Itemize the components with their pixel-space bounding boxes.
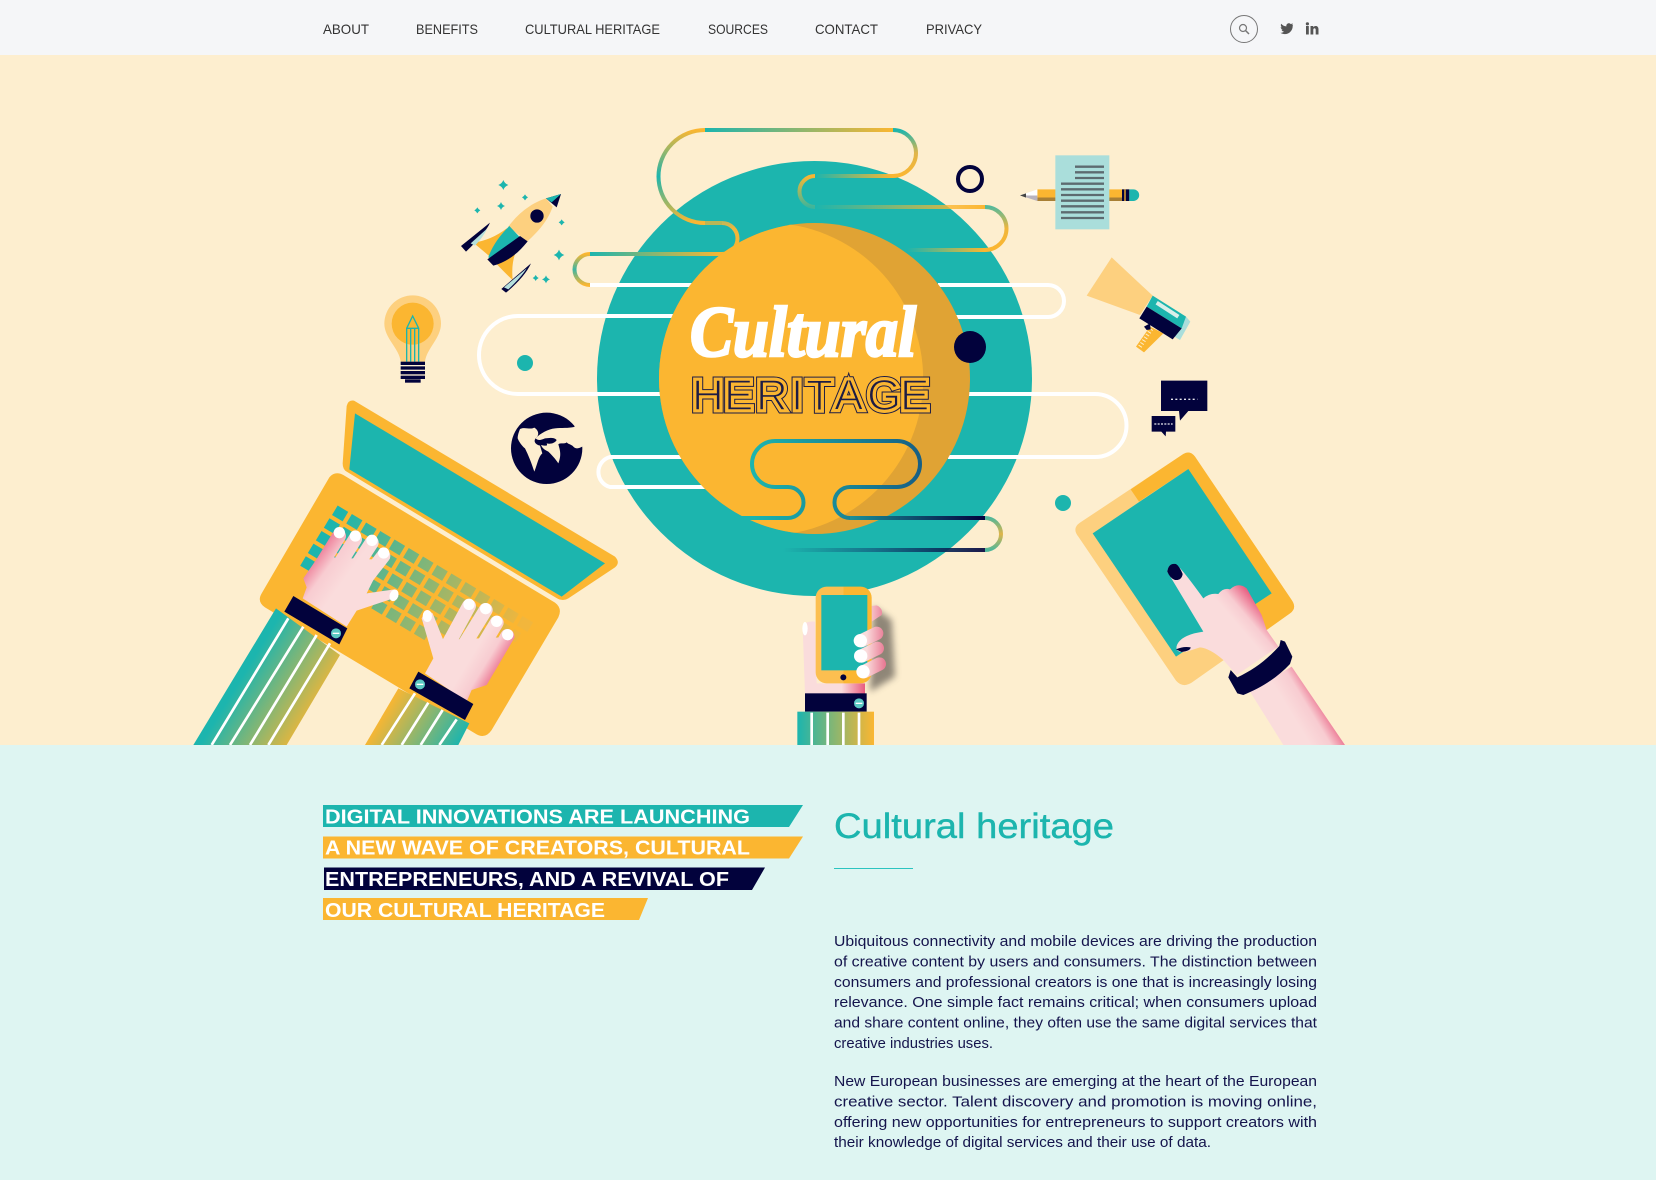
icon: rocket and stars bbox=[461, 180, 565, 293]
wrist band bbox=[1228, 640, 1292, 695]
tagline line 2: A NEW WAVE OF CREATORS, CULTURAL bbox=[325, 838, 750, 860]
white flowing lines bbox=[479, 285, 1126, 487]
nav links: CONTACT bbox=[815, 21, 878, 37]
laptop lid bbox=[343, 400, 618, 600]
icon: megaphone bbox=[1087, 257, 1190, 352]
icon: linkedin bbox=[1306, 22, 1318, 34]
icon: globe bbox=[511, 413, 587, 484]
title: HERITAGE: HERITAGE bbox=[692, 371, 929, 420]
left cuff bbox=[284, 596, 347, 644]
phone cuff bbox=[805, 693, 867, 712]
nav links: SOURCES bbox=[708, 21, 768, 37]
nav links: BENEFITS bbox=[416, 21, 478, 37]
heading rule bbox=[834, 868, 913, 869]
highlighted tagline bbox=[323, 805, 803, 922]
laptop hinge bbox=[345, 473, 560, 601]
right cuff bbox=[409, 672, 473, 720]
phone in hand bbox=[797, 587, 895, 745]
paragraph 1: Ubiquitous connectivity and mobile devices are driving the production bbox=[834, 934, 1317, 950]
palm and thumb bbox=[802, 622, 865, 694]
paragraph 1: and share content online, they often use the same digital services that bbox=[834, 1016, 1317, 1032]
paragraph 2 bbox=[834, 1074, 1317, 1151]
tablet body bbox=[1075, 452, 1294, 685]
nav links: CULTURAL HERITAGE bbox=[525, 21, 660, 37]
shadow bbox=[870, 607, 895, 692]
fingernail bbox=[1167, 564, 1183, 580]
tagline line 1: DIGITAL INNOVATIONS ARE LAUNCHING bbox=[325, 806, 750, 828]
teal dot left bbox=[517, 355, 533, 371]
orange central sphere bbox=[659, 223, 970, 534]
lower text section bbox=[0, 745, 1656, 1180]
paragraph 1 bbox=[834, 934, 1317, 1052]
icon: document and pencil bbox=[1020, 155, 1139, 229]
phone bbox=[816, 587, 872, 683]
arm bbox=[1250, 667, 1345, 745]
paragraph 2: New European businesses are emerging at the heart of the European bbox=[834, 1074, 1317, 1090]
right hand bbox=[422, 599, 515, 702]
icon: light bulb with pencil bbox=[384, 295, 441, 383]
right sleeve bbox=[365, 688, 469, 745]
paragraph 1: consumers and professional creators is one that is increasingly losing bbox=[834, 975, 1317, 991]
hero illustration bbox=[0, 55, 1656, 745]
tagline line 4: OUR CULTURAL HERITAGE bbox=[325, 900, 605, 922]
laptop base bbox=[260, 473, 560, 736]
paragraph 2: creative sector. Talent discovery and promotion is moving online, bbox=[834, 1094, 1317, 1110]
left hand bbox=[303, 527, 400, 627]
pointing hand bbox=[1167, 565, 1278, 675]
fingers bbox=[862, 633, 879, 672]
laptop with typing hands bbox=[193, 400, 618, 745]
tagline line 3: ENTREPRENEURS, AND A REVIVAL OF bbox=[325, 869, 729, 891]
paragraph 1: of creative content by users and consumers. The distinction between bbox=[834, 954, 1317, 970]
keyboard bbox=[303, 510, 534, 652]
paragraph 1: relevance. One simple fact remains critical; when consumers upload bbox=[834, 995, 1317, 1011]
navy dot bbox=[954, 331, 986, 363]
heading: Cultural heritage bbox=[834, 806, 1114, 846]
title: Cultural: Cultural bbox=[690, 292, 916, 372]
tablet with pointing hand bbox=[1075, 452, 1345, 745]
navy ring bbox=[958, 167, 982, 191]
top finger bbox=[872, 605, 882, 622]
gold and teal squiggle line bbox=[574, 130, 1006, 285]
title: HERITAGE: HERITAGE bbox=[692, 371, 929, 420]
icon: search bbox=[1230, 16, 1258, 42]
paragraph 1: creative industries uses. bbox=[834, 1036, 993, 1052]
lower teal squiggle bbox=[742, 441, 1001, 550]
nav links: ABOUT bbox=[323, 21, 369, 37]
background cut between arms bbox=[287, 655, 398, 745]
left sleeve bbox=[193, 608, 340, 745]
title: HERITAGE: HERITAGE bbox=[692, 371, 929, 420]
hero background bbox=[0, 55, 1656, 745]
navigation bar bbox=[0, 0, 1656, 55]
thumb nail bbox=[1176, 647, 1191, 652]
title: HERITAGE: HERITAGE bbox=[692, 371, 929, 420]
phone sleeve bbox=[797, 712, 874, 745]
icon: speech bubbles bbox=[1152, 381, 1207, 436]
teal dot right bbox=[1055, 495, 1071, 511]
paragraph 2: their knowledge of digital services and their use of data. bbox=[834, 1135, 1211, 1151]
large teal circle bbox=[597, 161, 1032, 596]
nav links bbox=[323, 21, 983, 37]
paragraph 2: offering new opportunities for entrepreneurs to support creators with bbox=[834, 1115, 1317, 1131]
nav links: PRIVACY bbox=[926, 21, 983, 37]
icon: twitter bbox=[1280, 23, 1293, 34]
